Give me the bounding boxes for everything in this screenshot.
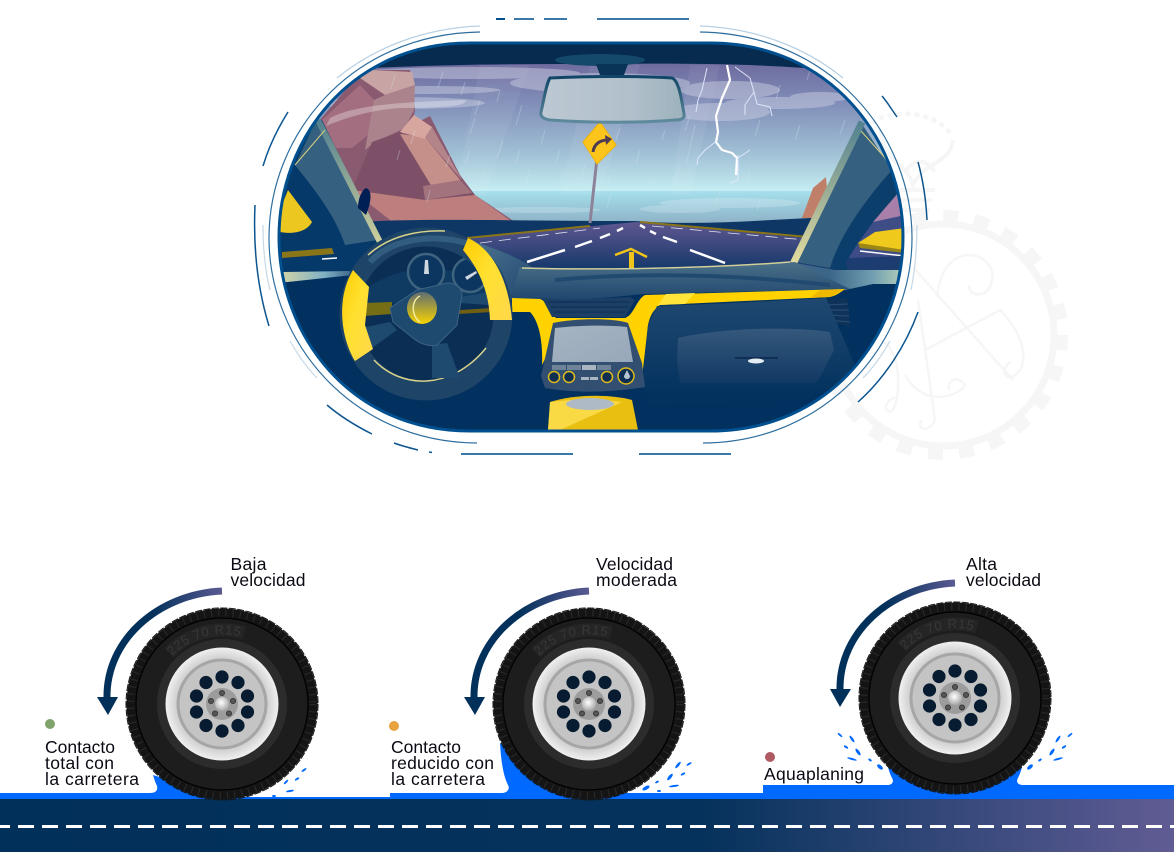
roof (376, 44, 804, 68)
label: contacto reducido: Contacto (391, 737, 461, 757)
tire 3: 225 70 R15 (900, 619, 974, 650)
label: contacto reducido: reducido con (391, 753, 494, 773)
windscreen border (279, 43, 903, 431)
label: Velocidad moderada: moderada (596, 570, 677, 590)
label: contacto total: la carretera (45, 769, 139, 789)
label: contacto total: total con (45, 753, 114, 773)
water drops 3 (837, 732, 1073, 771)
tire 1 (126, 608, 318, 800)
left pillar (295, 120, 380, 245)
hub (390, 283, 462, 346)
lightning (696, 65, 772, 183)
watermark: gear emblem (824, 114, 1062, 454)
label: Aquaplaning: Aquaplaning (764, 764, 864, 784)
vents (542, 297, 850, 327)
road markings (467, 222, 808, 263)
gauges (408, 254, 487, 292)
left exterior and yellow post (280, 120, 376, 282)
road (0, 799, 1174, 852)
yellow road arrow (615, 249, 647, 257)
tire 3 (858, 602, 1052, 794)
clouds and light beams (315, 65, 850, 213)
label: contacto reducido: la carretera (391, 769, 485, 789)
rotation arrow 2 (464, 591, 589, 715)
label: Velocidad moderada (596, 554, 677, 590)
rock right (802, 177, 829, 218)
label: contacto reducido (391, 737, 494, 789)
rotation arrow 1 (97, 591, 222, 715)
rotation arrow 3 (830, 583, 955, 707)
water layer (0, 743, 1174, 800)
label: contacto total (45, 737, 139, 789)
sky (318, 64, 886, 191)
decorative arcs around window (255, 26, 927, 452)
mirror (541, 54, 684, 122)
yellow dashboard trim (512, 289, 845, 378)
water drops 2 (642, 761, 692, 792)
hood behind wheel (476, 242, 532, 300)
marker: red dot (765, 752, 775, 762)
glove box (644, 298, 854, 383)
steering wheel (342, 231, 512, 391)
road arrow stem (629, 252, 634, 268)
marker: green dot (45, 719, 55, 729)
label: Velocidad moderada: Velocidad (596, 554, 673, 574)
road (470, 222, 826, 268)
yellow grips (342, 270, 373, 361)
right exterior (830, 172, 902, 270)
console bowl (548, 396, 638, 430)
tire 2 (492, 608, 686, 800)
lane dashes (0, 825, 1174, 828)
right light band (790, 262, 905, 290)
panel: high speed (764, 554, 1072, 794)
centre console (541, 319, 645, 392)
sea (472, 191, 812, 223)
road sign (583, 122, 616, 223)
wheel highlights (368, 231, 486, 381)
panel: moderate speed (389, 554, 692, 800)
water drops 1 (272, 767, 307, 797)
label: Alta velocidad (966, 554, 1041, 590)
windscreen illustration (270, 30, 910, 440)
dashboard top (510, 262, 850, 300)
right pillar (793, 122, 892, 268)
label: contacto total: Contacto (45, 737, 115, 757)
label: Alta velocidad: velocidad (966, 570, 1041, 590)
label: Baja velocidad: velocidad (230, 570, 306, 590)
tire 1: 225 70 R15 (167, 625, 240, 656)
rocks left (318, 70, 518, 224)
tire 2: 225 70 R15 (534, 625, 608, 656)
panel: low speed (45, 554, 318, 800)
label: Alta velocidad: Alta (966, 554, 997, 574)
marker: orange dot (389, 721, 399, 731)
label: Baja velocidad (230, 554, 306, 590)
far ground (350, 217, 850, 270)
dashboard base (286, 276, 896, 430)
decorative dashes: top and bottom (461, 18, 731, 455)
rain (391, 70, 845, 210)
label: Baja velocidad: Baja (230, 554, 267, 574)
